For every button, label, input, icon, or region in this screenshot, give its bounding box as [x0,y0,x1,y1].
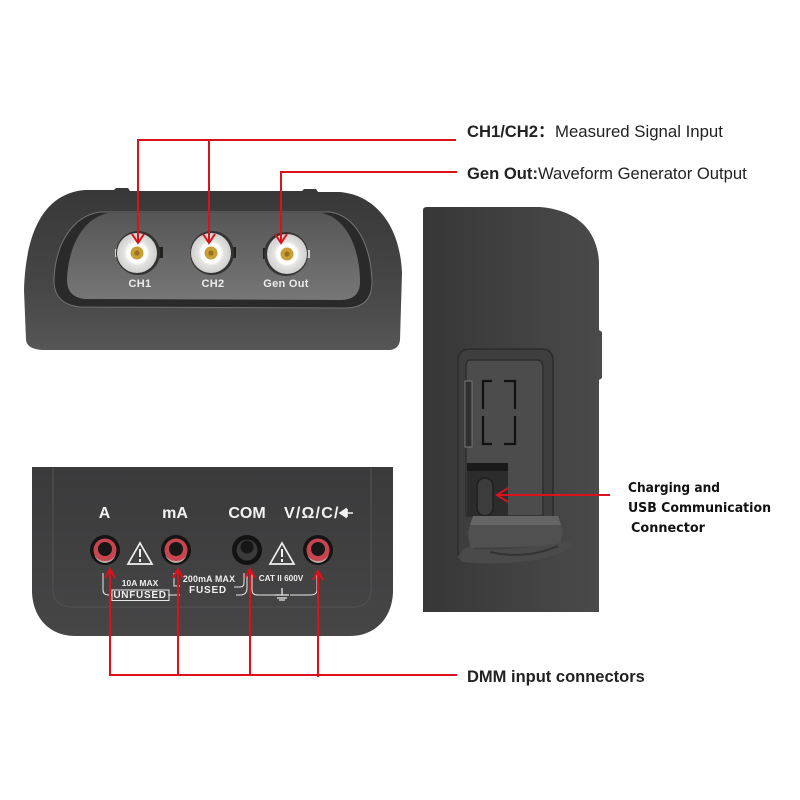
label: Gen Out: Gen Out [263,278,309,290]
arrow: CH1/CH2 leader [132,140,456,243]
label: V/Ω/C/diode: V/Ω/C/ [284,505,340,522]
port door recess [458,349,572,563]
panel: top view of device with BNC connectors [24,188,402,350]
callout: Gen Out: Gen Out:Waveform Generator Output [467,164,747,183]
label: A: A [99,505,111,522]
connector: CH2 [190,231,236,275]
arrow: Gen Out leader [275,172,457,243]
panel: bottom view of device with DMM terminals [32,467,393,636]
connector: Gen Out [263,232,310,276]
callout: charging and USB connector: Connector [631,521,706,536]
label: CH1: CH1 [129,278,151,290]
callout: CH1/CH2: CH1/CH2： [467,122,555,141]
icon: warning triangle left [128,543,152,564]
label: CH2: CH2 [202,278,224,290]
panel: side view of device with USB port [423,207,602,612]
callout: CH1/CH2: Measured Signal Input [555,122,723,141]
label: COM: COM [228,505,266,522]
terminal rating markings: UNFUSED [113,590,167,601]
terminal rating markings: 10A MAX [122,578,159,588]
arrow: USB connector leader [497,488,610,502]
jack: V [303,535,333,565]
connector: CH1 [115,231,163,275]
terminal rating markings: CAT II 600V [259,574,304,583]
label: mA: mA [162,505,188,522]
terminal rating markings [103,573,317,601]
terminal rating markings: FUSED [189,585,227,596]
arrow: DMM input leaders [105,569,457,677]
terminal rating markings: 200mA MAX [183,574,235,584]
icon: warning triangle right [270,543,294,564]
jack: COM [232,535,262,565]
jack: mA [161,535,191,565]
callout: DMM input connectors: DMM input connectors [467,668,645,686]
jack: A [90,535,120,565]
callout: charging and USB connector: USB Communication [628,501,771,516]
callout: charging and USB connector: Charging and [628,481,720,496]
